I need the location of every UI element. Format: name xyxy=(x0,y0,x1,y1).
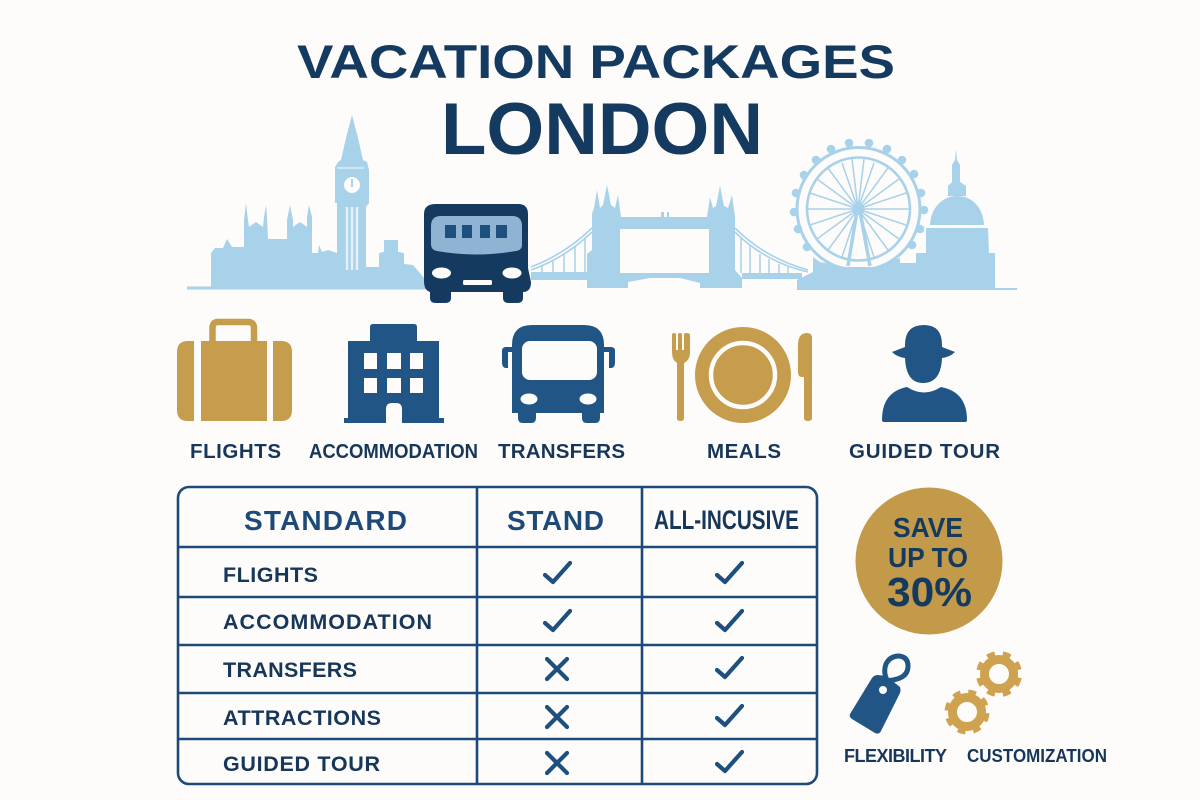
title: LONDON xyxy=(441,89,763,170)
savings badge: 30% xyxy=(887,569,972,615)
comparison table xyxy=(178,487,817,784)
label: transfers: TRANSFERS xyxy=(498,440,625,463)
feature: meals xyxy=(672,327,812,463)
feature: flexibility xyxy=(844,656,947,766)
London skyline xyxy=(187,115,1017,303)
table grid xyxy=(178,487,817,784)
row labels: ACCOMMODATION xyxy=(223,610,432,634)
icon: guide with hat xyxy=(882,325,967,422)
table header: ALL-INCUSIVE xyxy=(654,505,799,535)
skyline: London Eye xyxy=(790,139,928,270)
icon: price tag xyxy=(850,656,908,734)
icon: hotel xyxy=(344,324,444,423)
icon: gears xyxy=(945,650,1023,734)
savings badge: SAVE xyxy=(893,512,963,543)
label: meals: MEALS xyxy=(707,440,781,463)
row labels xyxy=(223,563,432,776)
icon: suitcase xyxy=(177,322,292,421)
label: flexibility: FLEXIBILITY xyxy=(844,746,947,766)
savings badge xyxy=(856,488,1002,634)
label: customization: CUSTOMIZATION xyxy=(967,746,1107,766)
table header: STANDARD xyxy=(244,505,407,536)
icon: bus front xyxy=(502,325,615,423)
title: VACATION PACKAGES xyxy=(297,35,895,88)
label: flights: FLIGHTS xyxy=(190,440,281,463)
row labels: GUIDED TOUR xyxy=(223,752,380,776)
table header xyxy=(244,505,799,536)
icon: tour bus xyxy=(424,204,531,303)
title xyxy=(297,35,895,170)
savings badge: UP TO xyxy=(888,542,968,573)
row labels: TRANSFERS xyxy=(223,658,357,682)
feature: transfers xyxy=(498,325,625,463)
feature: flights xyxy=(177,322,292,463)
table header: STAND xyxy=(507,505,604,536)
skyline: Westminster and Big Ben xyxy=(187,115,427,290)
check and cross marks xyxy=(545,563,742,773)
skyline: Tower Bridge xyxy=(531,185,808,288)
row labels: FLIGHTS xyxy=(223,563,318,587)
feature: accommodation xyxy=(309,324,478,463)
skyline: St Paul's dome and base xyxy=(797,149,1017,290)
label: accommodation: ACCOMMODATION xyxy=(309,440,478,463)
feature: guided tour xyxy=(849,325,1000,463)
row labels: ATTRACTIONS xyxy=(223,706,381,730)
icon: plate and cutlery xyxy=(672,327,812,423)
label: guided tour: GUIDED TOUR xyxy=(849,440,1000,463)
feature: customization xyxy=(945,650,1107,766)
